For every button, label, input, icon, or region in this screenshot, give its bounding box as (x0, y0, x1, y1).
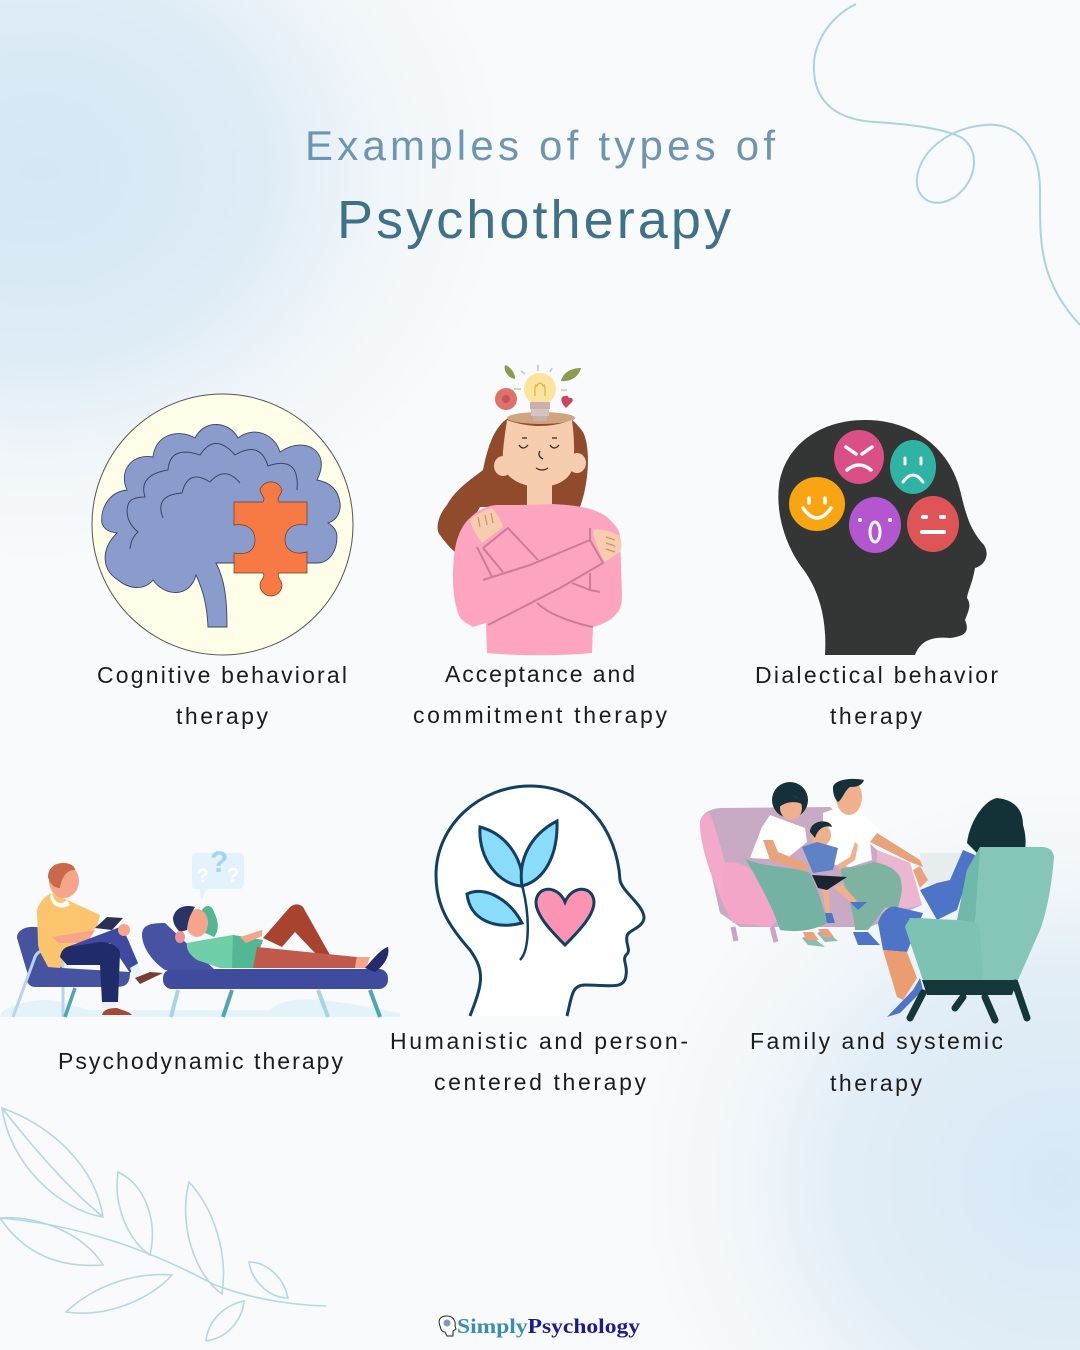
caption: dialectical behavior therapy: Dialectical behavior (755, 662, 998, 688)
icon: therapist and patient on couch (0, 846, 400, 1017)
caption: humanistic and person-centered therapy: Humanistic and person- (390, 1028, 688, 1054)
caption: humanistic and person-centered therapy: centered therapy (434, 1069, 646, 1095)
caption: family and systemic therapy: Family and systemic (750, 1028, 1003, 1054)
caption: dialectical behavior therapy: therapy (830, 703, 922, 729)
caption: cognitive behavioral therapy: Cognitive behavioral (97, 662, 347, 688)
panel: humanistic and person-centered therapy (390, 786, 688, 1095)
caption: acceptance and commitment therapy (413, 661, 668, 728)
panel: cognitive behavioral therapy (92, 394, 353, 729)
decorative leaf branch bottom left (0, 1108, 326, 1341)
panel: family and systemic therapy (700, 779, 1054, 1096)
caption: acceptance and commitment therapy: commitment therapy (413, 702, 668, 728)
icon: brain with puzzle piece (92, 394, 353, 655)
caption: family and systemic therapy: therapy (830, 1070, 922, 1096)
caption: dialectical behavior therapy (755, 662, 998, 729)
icon: woman hugging herself with light bulb (438, 365, 622, 655)
panel: dialectical behavior therapy (755, 420, 998, 729)
caption: family and systemic therapy (750, 1028, 1003, 1096)
title: Psychotherapy (337, 190, 731, 250)
title (305, 122, 775, 250)
caption: cognitive behavioral therapy (97, 662, 347, 729)
caption: psychodynamic therapy: Psychodynamic therapy (58, 1048, 344, 1074)
caption: cognitive behavioral therapy: therapy (176, 703, 268, 729)
panel: psychodynamic therapy (0, 846, 400, 1074)
title: Examples of types of (305, 122, 775, 169)
panel: acceptance and commitment therapy (413, 365, 668, 728)
icon: therapist and patient on couch: ? (210, 846, 228, 879)
caption: humanistic and person-centered therapy (390, 1028, 688, 1095)
icon: therapist and patient on couch: ? (197, 866, 209, 887)
caption: acceptance and commitment therapy: Acceptance and (445, 661, 635, 687)
logo: SimplyPsychology: Simply Psychology (457, 1314, 641, 1338)
icon: therapist and patient on couch: ? (227, 865, 239, 887)
icon: head outline with leaves and heart (436, 786, 644, 1016)
icon: family with therapist (700, 779, 1054, 1020)
icon: dark head silhouette with emotion faces (778, 420, 987, 655)
decorative swirl top right (814, 4, 1080, 325)
